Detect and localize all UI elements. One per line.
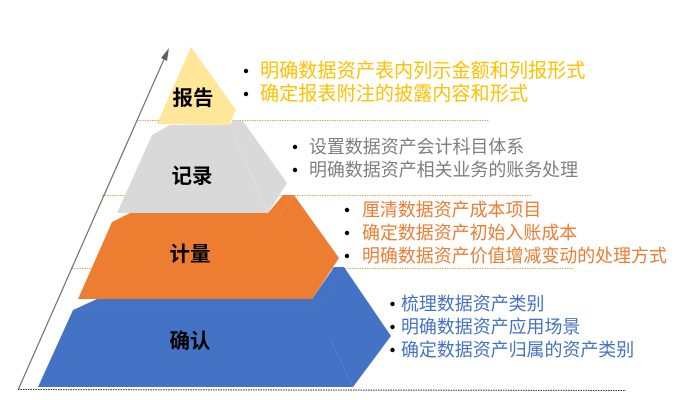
tier: gray 记录 — [117, 121, 287, 213]
label: 确认: 确认 — [170, 330, 211, 353]
text block: 记录 bullets: 设置数据资产会计科目体系 — [309, 137, 524, 157]
tier: orange 计量 — [78, 195, 339, 299]
text block: 确认 bullets: 确定数据资产归属的资产类别 — [401, 340, 634, 360]
text block: 计量 bullets: 确定数据资产初始入账成本 — [362, 223, 577, 243]
tier: yellow top 报告 — [157, 47, 236, 125]
text block: 计量 bullets: 明确数据资产价值增减变动的处理方式 — [362, 246, 667, 266]
text block: 计量 bullets — [345, 200, 667, 266]
arrow: upward axis — [18, 48, 169, 389]
text block: 报告 bullets: 确定报表附注的披露内容和形式 — [260, 83, 528, 105]
text block: 报告 bullets — [244, 60, 585, 105]
text block: 计量 bullets: 厘清数据资产成本项目 — [362, 200, 541, 220]
text block: 报告 bullets: 明确数据资产表内列示金额和列报形式 — [260, 60, 585, 82]
label: 报告: 报告 — [172, 87, 214, 110]
text block: 确认 bullets: 明确数据资产应用场景 — [401, 317, 580, 337]
label: 记录: 记录 — [172, 165, 212, 188]
text block: 确认 bullets: 梳理数据资产类别 — [401, 294, 544, 314]
text block: 记录 bullets: 明确数据资产相关业务的账务处理 — [309, 160, 578, 180]
tier: blue base 确认 — [38, 267, 391, 387]
label: 计量: 计量 — [170, 243, 210, 266]
text block: 确认 bullets — [390, 294, 634, 360]
text block: 记录 bullets — [293, 137, 578, 180]
